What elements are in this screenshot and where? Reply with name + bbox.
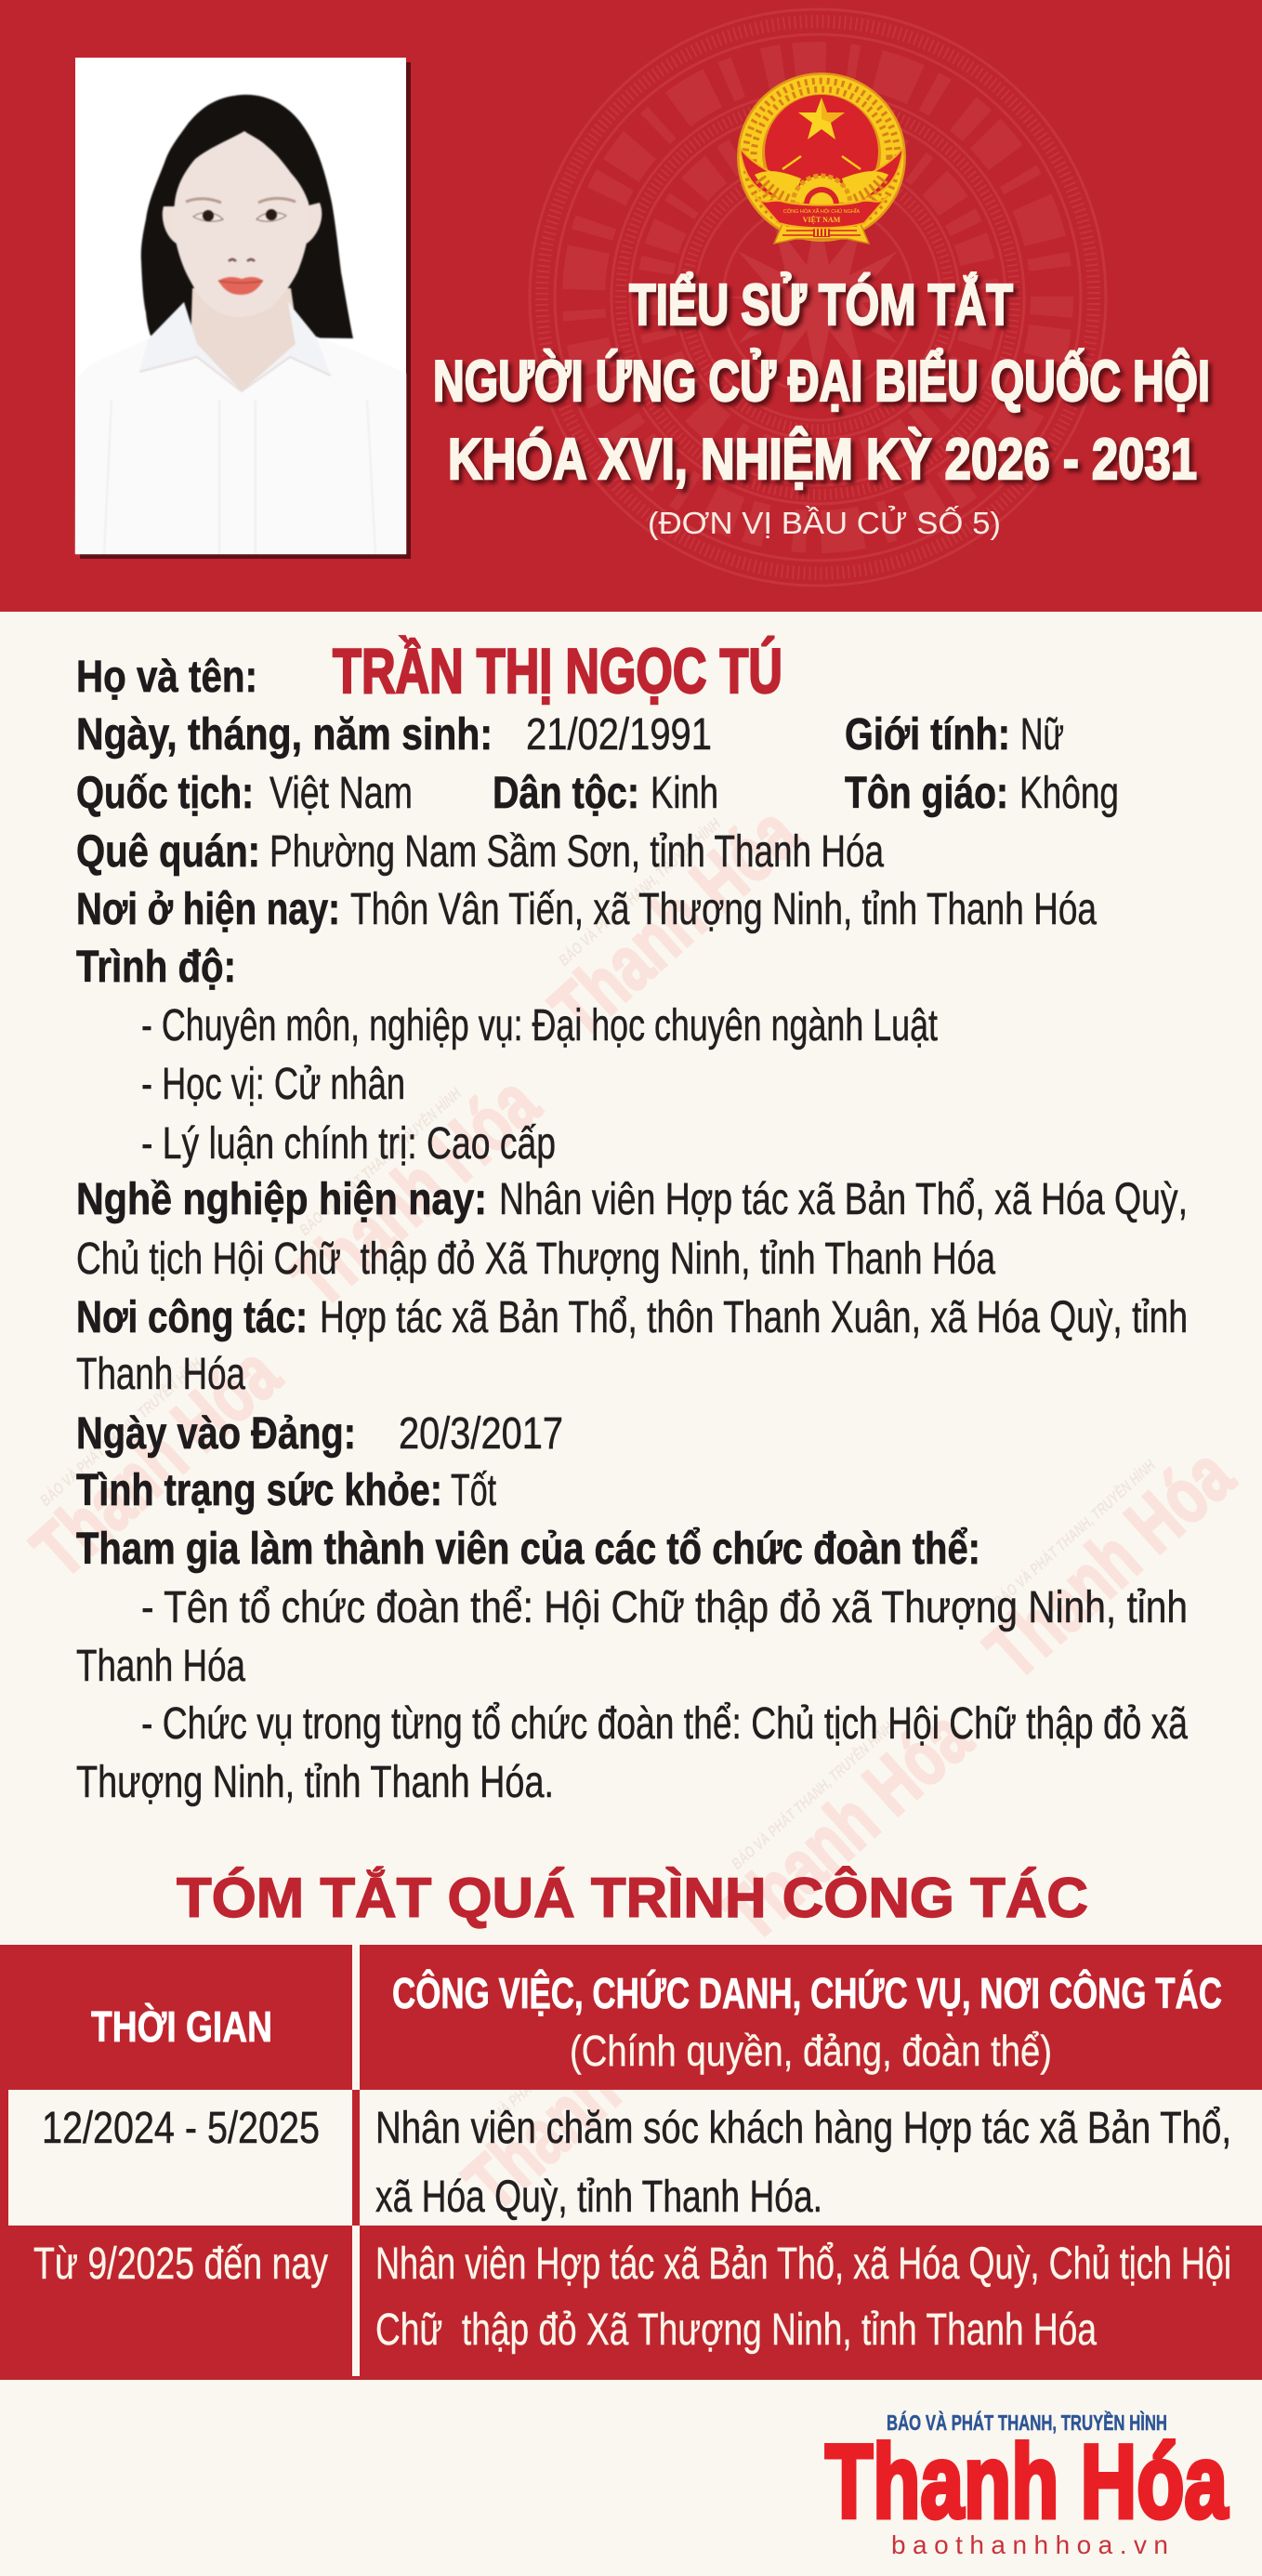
face	[173, 131, 310, 317]
watermarks: BÁO VÀ PHÁT THANH, TRUYỀN HÌNH	[469, 1988, 638, 2143]
brows	[186, 198, 296, 203]
table: work history	[0, 1945, 1262, 2380]
field: organisation membership: Thanh Hóa	[76, 1642, 245, 1691]
table row 2	[0, 2226, 1262, 2380]
field: health status: Tình trạng sức khỏe:	[76, 1466, 442, 1515]
field: birth date and gender: Nữ	[1020, 710, 1064, 760]
table row 1: xã Hóa Quỳ, tỉnh Thanh Hóa.	[375, 2173, 822, 2222]
field: current residence	[76, 885, 1097, 934]
field: workplace: Thanh Hóa	[76, 1350, 245, 1399]
field: qualifications: - Lý luận chính trị: Cao cấp	[141, 1119, 556, 1169]
field: qualifications	[76, 943, 938, 1169]
field: party admission date	[76, 1409, 563, 1459]
field: home town: Phường Nam Sầm Sơn, tỉnh Thanh Hóa	[269, 827, 884, 877]
table row 2: Từ 9/2025 đến nay	[33, 2239, 328, 2289]
field: birth date and gender	[76, 710, 1064, 760]
field: birth date and gender: 21/02/1991	[526, 710, 712, 760]
table row 1	[0, 2090, 1231, 2226]
icon: national emblem: VIỆT NAM	[803, 216, 841, 224]
field: qualifications: - Học vị: Cử nhân	[141, 1060, 405, 1109]
field: full name: Họ và tên:	[76, 653, 257, 702]
table header row: THỜI GIAN	[91, 2002, 272, 2051]
field: current occupation: Chủ tịch Hội Chữ thập đỏ Xã Thượng Ninh, tỉnh Thanh Hóa	[76, 1235, 995, 1284]
watermarks: Thanh Hóa	[275, 1059, 556, 1323]
field: home town: Quê quán:	[76, 827, 260, 877]
field: current occupation	[76, 1175, 1188, 1284]
nose	[229, 259, 255, 261]
field: nationality, ethnicity, religion: Việt Nam	[269, 769, 413, 818]
watermarks: BÁO VÀ PHÁT THANH, TRUYỀN HÌNH	[296, 1084, 465, 1239]
field: party admission date: 20/3/2017	[399, 1409, 563, 1459]
field: workplace	[76, 1293, 1188, 1399]
watermarks: BÁO VÀ PHÁT THANH, TRUYỀN HÌNH	[37, 1354, 205, 1510]
table row 1: 12/2024 - 5/2025	[42, 2104, 320, 2153]
watermarks: Thanh Hóa	[534, 789, 815, 1053]
portrait photo	[75, 58, 411, 559]
field: qualifications: - Chuyên môn, nghiệp vụ: Đại học chuyên ngành Luật	[141, 1001, 938, 1050]
field: nationality, ethnicity, religion: Dân tộc:	[493, 769, 639, 818]
field: birth date and gender: Giới tính:	[845, 710, 1010, 760]
ears	[163, 203, 322, 244]
title: TIỂU SỬ TÓM TẮT	[629, 273, 1013, 337]
field: nationality, ethnicity, religion: Tôn giáo:	[845, 769, 1008, 818]
neck	[191, 288, 299, 391]
logo: Thanh Hoa newspaper: BÁO VÀ PHÁT THANH, TRUYỀN HÌNH	[887, 2410, 1167, 2435]
table header row	[0, 1945, 1262, 2090]
field: health status: Tốt	[451, 1466, 496, 1515]
title	[433, 273, 1210, 492]
field: qualifications: Trình độ:	[76, 943, 236, 992]
icon: national emblem: CỘNG HÒA XÃ HỘI CHỦ NGHĨA	[783, 208, 860, 215]
field: party admission date: Ngày vào Đảng:	[76, 1409, 356, 1459]
lips	[218, 277, 263, 295]
field: organisation membership	[76, 1525, 1188, 1807]
logo: Thanh Hoa newspaper: baothanhhoa.vn	[891, 2530, 1168, 2559]
field: full name	[76, 635, 782, 707]
field: organisation membership: Thượng Ninh, tỉnh Thanh Hóa.	[76, 1758, 554, 1807]
watermarks: BÁO VÀ PHÁT THANH, TRUYỀN HÌNH	[556, 814, 724, 970]
eyes	[193, 213, 286, 221]
field: nationality, ethnicity, religion: Kinh	[651, 769, 718, 818]
field: birth date and gender: Ngày, tháng, năm sinh:	[76, 710, 493, 760]
watermarks: BÁO VÀ PHÁT THANH, TRUYỀN HÌNH	[729, 1718, 897, 1873]
field: current occupation: Nghề nghiệp hiện nay:	[76, 1175, 487, 1224]
field: home town	[76, 827, 884, 877]
subtitle: electoral unit: (ĐƠN VỊ BẦU CỬ SỐ 5)	[648, 505, 1001, 540]
hair	[141, 95, 353, 338]
icon: national emblem	[737, 73, 906, 244]
field: workplace: Nơi công tác:	[76, 1293, 308, 1342]
field: nationality, ethnicity, religion: Không	[1019, 769, 1119, 818]
field: full name: TRẦN THỊ NGỌC TÚ	[333, 635, 782, 707]
bronze drum background pattern	[530, 9, 1106, 586]
watermarks: Thanh Hóa	[448, 1962, 729, 2226]
field: organisation membership: Tham gia làm thành viên của các tổ chức đoàn thể:	[76, 1525, 980, 1574]
field: current residence: Nơi ở hiện nay:	[76, 885, 340, 934]
table header row: (Chính quyền, đảng, đoàn thể)	[570, 2027, 1052, 2075]
watermarks: BÁO VÀ PHÁT THANH, TRUYỀN HÌNH	[991, 1456, 1159, 1611]
watermarks	[9, 782, 1250, 2226]
watermarks: Thanh Hóa	[16, 1329, 296, 1593]
field: nationality, ethnicity, religion: Quốc tịch:	[76, 769, 254, 818]
watermarks: Thanh Hóa	[707, 1693, 988, 1957]
header panel	[0, 0, 1262, 612]
shirt	[75, 302, 406, 554]
heading: work history summary: TÓM TẮT QUÁ TRÌNH CÔNG TÁC	[177, 1867, 1088, 1929]
field: nationality, ethnicity, religion	[76, 769, 1119, 818]
